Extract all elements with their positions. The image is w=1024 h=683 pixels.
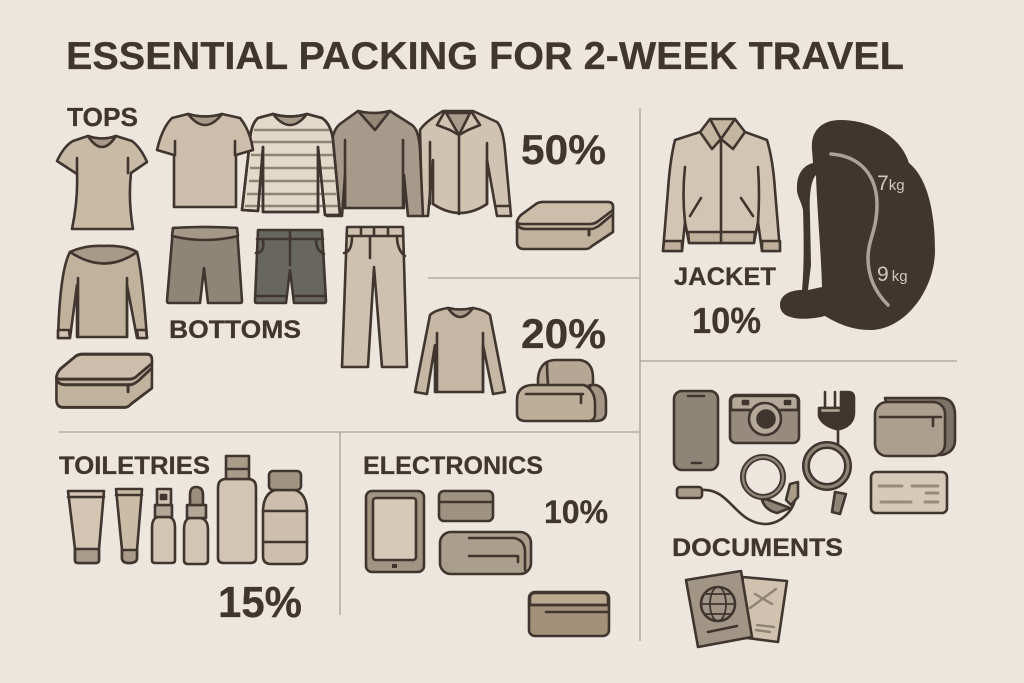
- heading: documents: DOCUMENTS: [672, 534, 843, 562]
- percentage: bottoms 20%: 20%: [521, 310, 606, 357]
- percentage: jacket 10%: 10%: [692, 300, 761, 341]
- icon: small pouch: [439, 491, 493, 521]
- heading: toiletries: TOILETRIES: [59, 452, 210, 480]
- panel: toiletries: [59, 452, 307, 627]
- icon: grey shorts: [167, 227, 242, 303]
- title: ESSENTIAL PACKING FOR 2-WEEK TRAVEL: [66, 35, 904, 78]
- icon: packing cube top right: [517, 202, 613, 249]
- icon: boarding pass: [732, 577, 787, 642]
- icon: wallet card: [529, 592, 609, 636]
- icon: spray bottle: [152, 489, 175, 563]
- icon: camera: [730, 395, 799, 443]
- percentage: tops 50%: 50%: [521, 126, 606, 173]
- icon: packing cube: [56, 354, 152, 407]
- icon: toiletry pouch: [875, 398, 955, 456]
- heading: electronics: ELECTRONICS: [363, 452, 543, 480]
- icon: dropper bottle: [184, 487, 208, 564]
- icon: tube one: [68, 491, 104, 563]
- icon: tall bottle: [218, 456, 256, 563]
- heading: tops: TOPS: [67, 102, 138, 132]
- icon: tube two: [116, 489, 142, 563]
- icon: wide pouch: [440, 532, 531, 574]
- panel: electronics: [363, 452, 609, 636]
- heading: bottoms: BOTTOMS: [169, 316, 301, 344]
- icon: beige trousers: [342, 227, 407, 367]
- icon: USB cable coil: [677, 457, 798, 524]
- heading: jacket: JACKET: [674, 263, 776, 291]
- icon: jacket: [663, 119, 780, 251]
- icon: sweater with wide collar: [58, 246, 147, 338]
- percentage: electronics 10%: 10%: [544, 494, 608, 530]
- icon: t-shirt: [157, 114, 253, 207]
- percentage: toiletries 15%: 15%: [218, 578, 302, 627]
- icon: phone: [674, 391, 718, 470]
- icon: striped long-sleeve top: [242, 114, 340, 215]
- icon: charger plug and coiled cable: [806, 392, 854, 514]
- icon: ticket: [871, 472, 947, 513]
- icon: women's t-shirt: [57, 136, 147, 229]
- panel: jacket and backpack: [663, 119, 780, 341]
- icon: passport: [686, 571, 752, 647]
- weight label: 9 kg: 9kg: [877, 263, 908, 286]
- weight label: 7 kg: 7kg: [877, 172, 905, 195]
- icon: duffel bag: [517, 360, 606, 421]
- icon: dark denim shorts: [255, 230, 326, 303]
- icon: backpack: [780, 120, 935, 330]
- icon: crewneck sweater: [415, 308, 505, 394]
- panel: bottoms: [167, 227, 606, 421]
- icon: tablet: [366, 491, 424, 572]
- icon: button shirt: [420, 111, 511, 216]
- panel: documents and devices: [672, 391, 955, 647]
- icon: wide jar: [263, 471, 307, 564]
- icon: v-neck sweater: [327, 111, 423, 216]
- panel: tops: [56, 102, 613, 407]
